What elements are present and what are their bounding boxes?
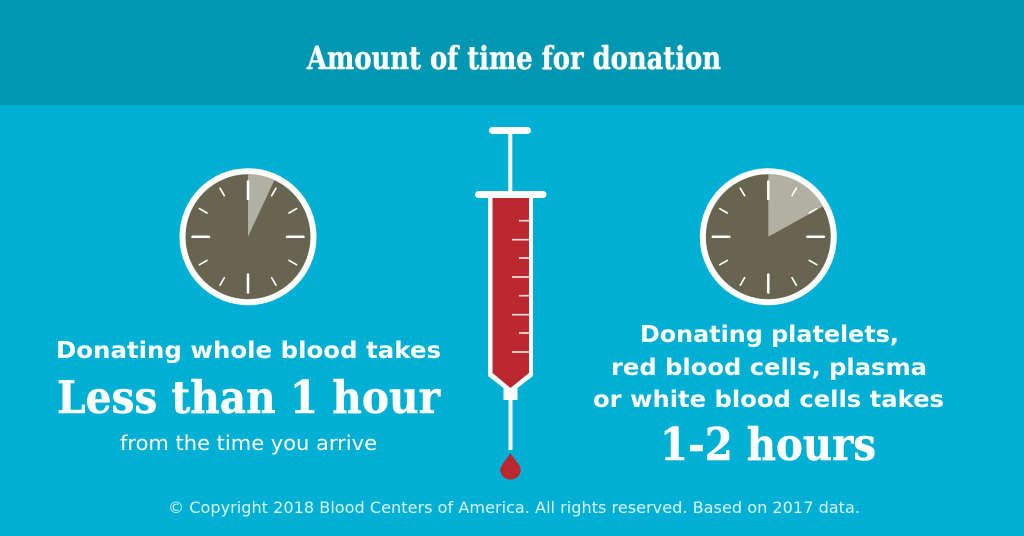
icon: blood drop <box>500 453 521 480</box>
text block: whole blood: Donating whole blood takes <box>56 338 441 364</box>
text block: platelets, red cells, plasma, white cells: or white blood cells takes <box>593 387 944 413</box>
icon: syringe <box>475 127 546 480</box>
text block: whole blood: from the time you arrive <box>120 431 377 455</box>
text block: platelets, red cells, plasma, white cells: 1-2 hours <box>660 418 876 471</box>
text block: platelets, red cells, plasma, white cells: Donating platelets, <box>640 322 899 348</box>
icon: clock showing one to two hours <box>700 168 837 305</box>
text block: platelets, red cells, plasma, white cells <box>593 322 944 471</box>
icon: clock showing under one hour <box>180 168 316 305</box>
text block: whole blood <box>56 338 441 455</box>
title: Amount of time for donation <box>306 40 721 77</box>
text block: platelets, red cells, plasma, white cells: red blood cells, plasma <box>611 355 927 381</box>
header band <box>0 0 1024 105</box>
footer copyright: © Copyright 2018 Blood Centers of America. All rights reserved. Based on 2017 data. <box>168 498 860 517</box>
text block: whole blood: Less than 1 hour <box>57 371 441 424</box>
blood fill <box>492 198 529 388</box>
